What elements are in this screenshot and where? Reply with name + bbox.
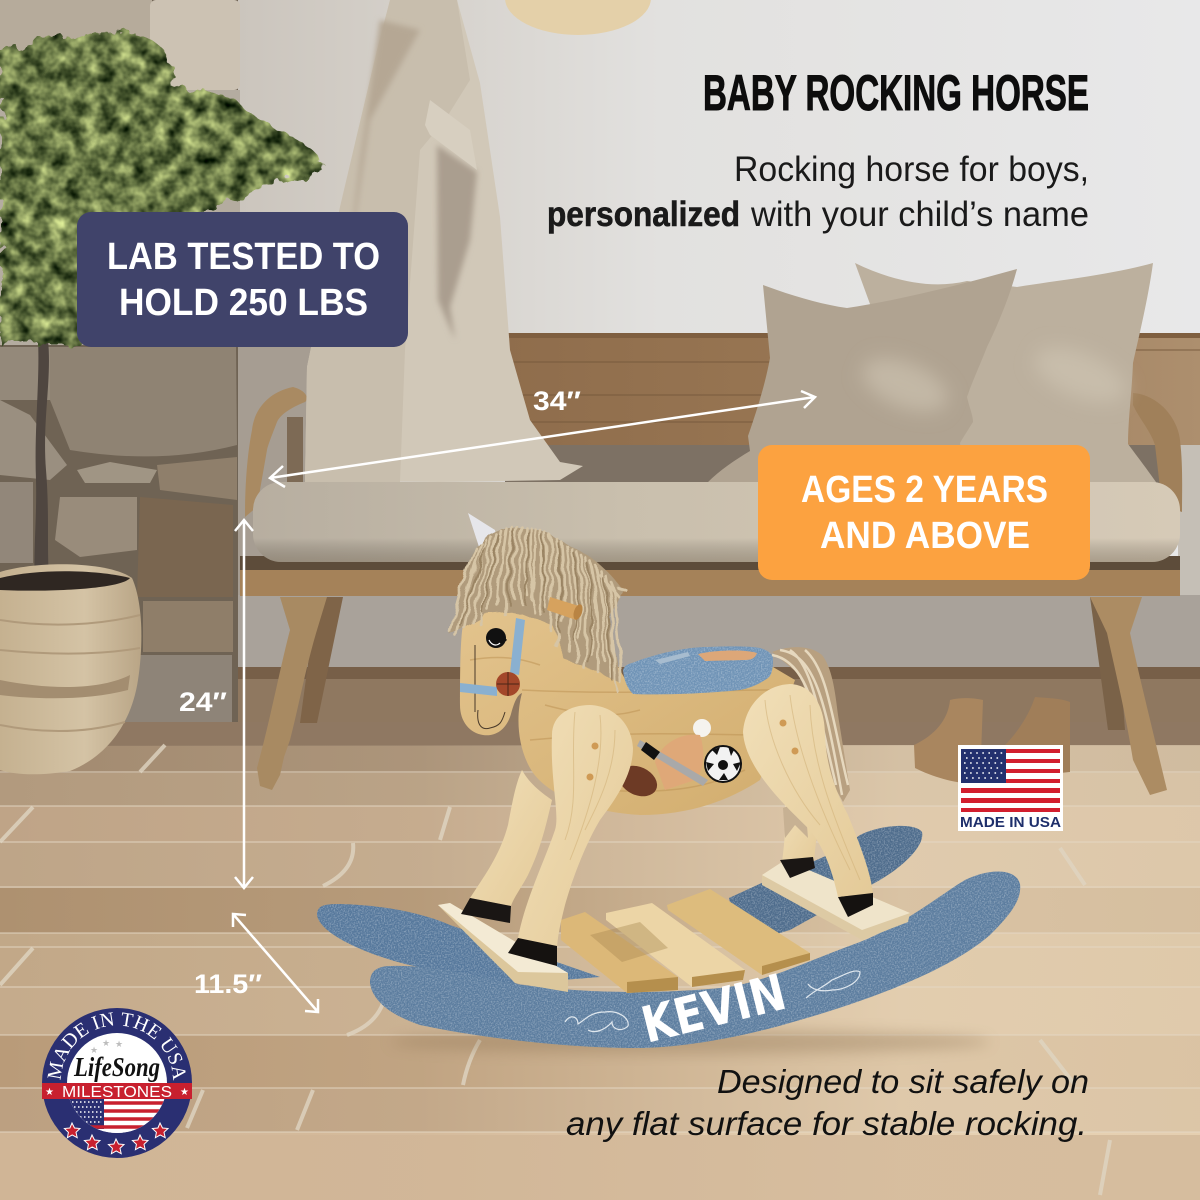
horse eye [486,628,507,648]
wooden bench [240,333,1200,795]
foliage [0,33,325,345]
hanging coat [305,0,583,482]
near front leg [518,705,633,948]
callout: ages: AGES 2 YEARS [801,469,1048,511]
far back hoof [780,857,815,878]
badge lower flag [70,1099,164,1133]
bench rear legs [300,597,343,723]
basketball ornament [496,672,520,696]
trunk [34,340,50,590]
banner stars [45,1087,189,1098]
badge: Made in the USA: MILESTONES [62,1084,172,1101]
baseboard [238,667,1200,724]
mane [450,526,626,690]
badge grey stars: ★ [90,1045,98,1055]
stone wall [0,0,240,725]
far front hoof [461,898,511,923]
bench armrests [245,387,307,517]
dimension: 34 inch width [270,386,815,487]
far back leg [782,800,820,862]
subtitle: with your child’s name [750,195,1089,234]
floor [0,722,1200,1200]
front leg dowels [586,742,598,780]
rocker name: KEVIN [636,963,792,1055]
near back leg [743,684,873,897]
callout: ages: AND ABOVE [820,515,1030,557]
badge grey stars [90,1038,123,1055]
dimension: 11.5 inch depth: 11.5″ [194,969,262,999]
near front hoof [508,938,557,966]
footer note [566,1063,1089,1142]
callout: lab tested: LAB TESTED TO [107,236,380,278]
product: rocking horse [317,513,1020,1055]
bridle [460,618,525,696]
dimension: 11.5 inch depth [194,914,318,1012]
callout: lab tested [77,212,408,347]
badge logo: LifeSong [73,1052,160,1082]
shoes [914,697,1070,783]
back rocker board [762,860,910,940]
dimension: 24 inch height: 24″ [179,687,227,717]
saddle [623,646,773,694]
far rocker [317,826,922,985]
wall shadow left [238,345,318,600]
badge grey stars: ★ [102,1038,110,1048]
seat cushion [253,482,1180,562]
callout: lab tested: HOLD 250 LBS [119,282,368,324]
badge grey stars: ★ [115,1039,123,1049]
far front leg [470,770,552,906]
horse ear [468,513,502,572]
face lines [475,645,505,729]
dimension: 24 inch height [179,520,253,888]
footer note: any flat surface for stable rocking. [566,1105,1087,1142]
footer note: Designed to sit safely on [717,1063,1089,1100]
near rocker [370,872,1020,1048]
subtitle: Rocking horse for boys, [734,150,1089,189]
subtitle: personalized [547,195,740,234]
saddle decorations [655,650,757,664]
dimension: 34 inch width: 34″ [533,386,581,416]
flag: made in USA [958,745,1063,831]
flag: made in USA: MADE IN USA [960,814,1061,831]
potted plant [0,33,325,774]
badge banner [42,1083,192,1099]
sports decorations [614,719,741,802]
baseball [693,719,711,737]
baseball glove [655,735,703,790]
bench front legs [257,597,327,790]
badge: Made in the USA [42,1008,192,1158]
banner stars: ★ [180,1087,189,1098]
pillows [707,263,1165,495]
subtitle [547,150,1089,234]
back leg grain [765,695,860,880]
badge arc text: MADE IN THE USA [48,1012,186,1080]
rocker flourishes [565,971,860,1032]
body grain [460,658,770,791]
horse body and head [460,595,795,815]
pot [0,564,141,774]
near back hoof [838,892,873,917]
football [614,760,662,802]
front rocker board [438,903,568,992]
floor shadow [390,1030,990,1054]
bench seat rail [240,556,1180,596]
banner stars: ★ [45,1087,54,1098]
foot slats [561,889,810,993]
back leg dowels [780,720,798,754]
bench back shadow [505,440,1200,490]
hat on the wall [505,0,651,35]
lower wall [238,595,1200,672]
callout: ages [758,445,1090,580]
bat [637,740,708,786]
front leg grain [565,712,615,860]
badge stars [64,1123,168,1154]
soccer ball [705,746,741,782]
wooden handle [547,597,584,621]
horse tail [772,647,850,838]
